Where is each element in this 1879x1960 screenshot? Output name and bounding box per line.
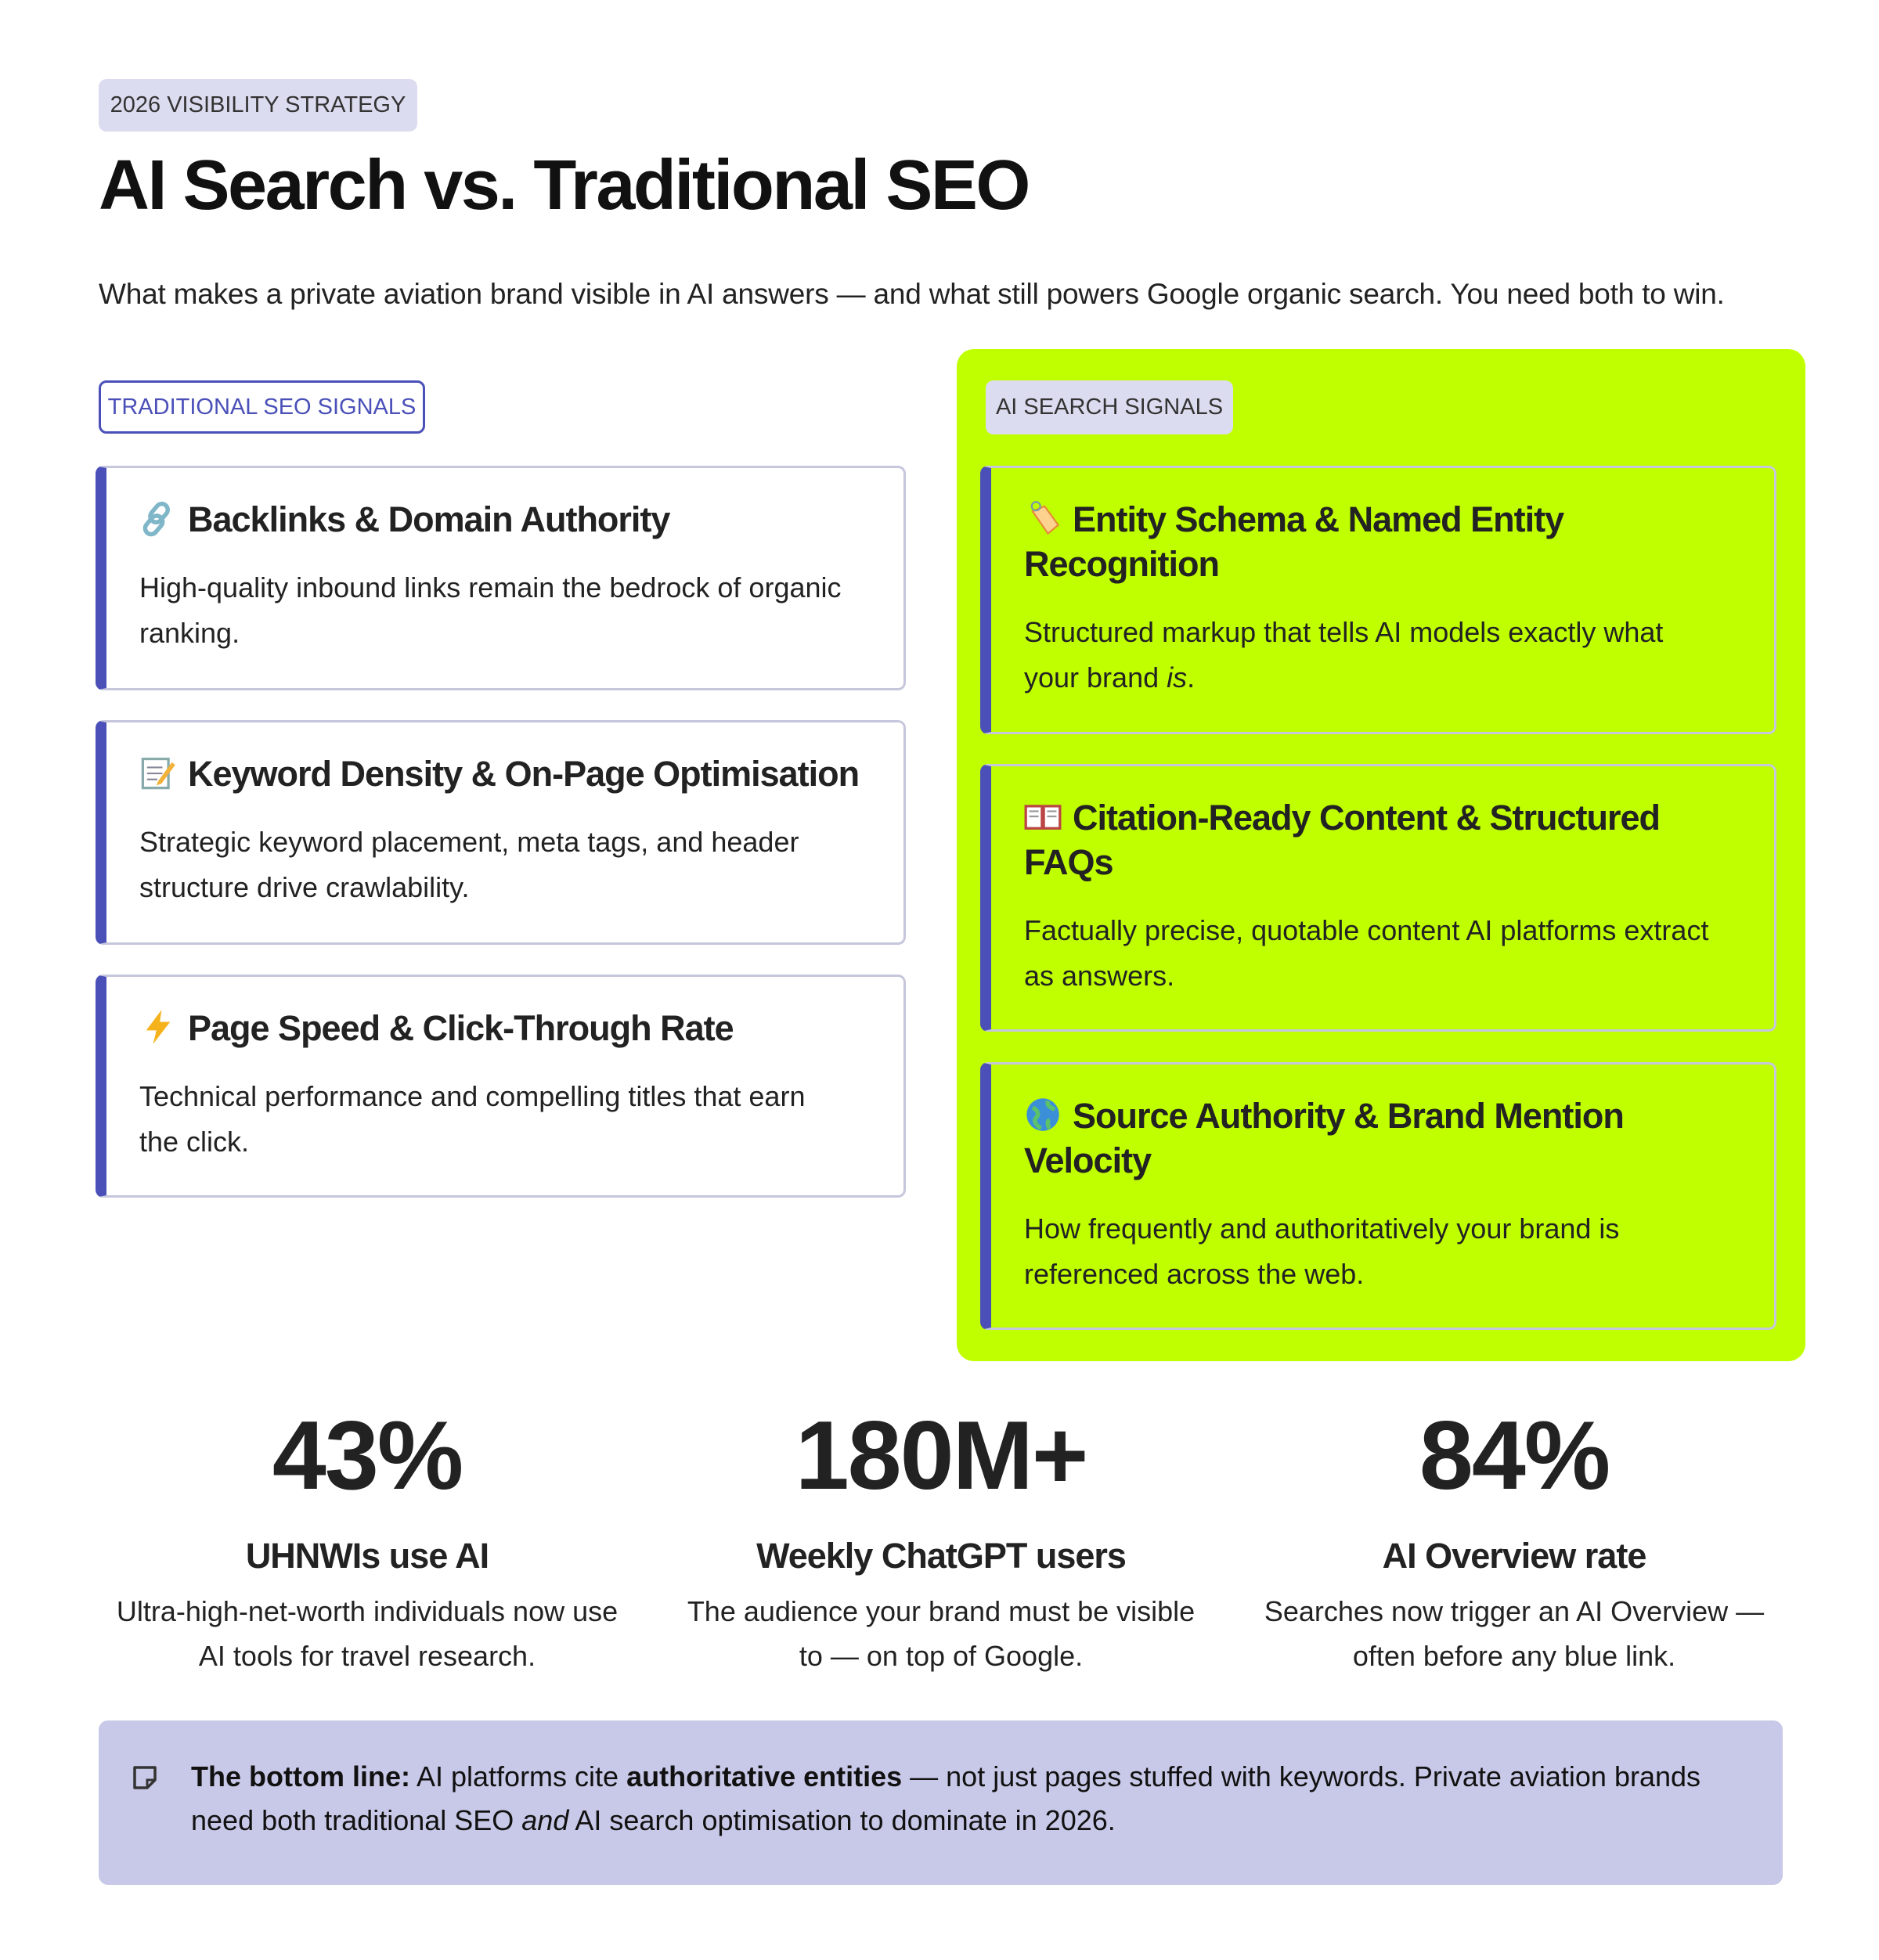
card title: entity: Entity Schema & Named Entity [1073, 499, 1563, 539]
card text [139, 826, 799, 903]
stat: 84%: AI Overview rate [1383, 1536, 1646, 1576]
card: page speed [96, 975, 906, 1198]
card title: speed: Page Speed & Click-Through Rate [188, 1008, 734, 1048]
card title: source [1024, 1096, 1624, 1180]
stat: 180M+ [687, 1402, 1195, 1672]
title: AI Search vs. Traditional SEO [99, 146, 1029, 225]
card text: the click. [139, 1126, 249, 1158]
card title: citation [1024, 798, 1660, 882]
card title: source: Velocity [1024, 1140, 1151, 1180]
card title: entity [1024, 499, 1564, 584]
tag: AI search signals [986, 380, 1233, 434]
tag: 2026 visibility strategy: 2026 VISIBILITY STRATEGY [110, 92, 406, 117]
card text: How frequently and authoritatively your brand is [1024, 1212, 1619, 1245]
stat: 180M+: 180M+ [795, 1402, 1087, 1510]
card text [139, 571, 842, 649]
card title: entity: Recognition [1024, 544, 1219, 584]
stat: 43%: UHNWIs use AI [246, 1536, 489, 1576]
card: backlinks [96, 466, 906, 690]
stat: 43% [117, 1402, 618, 1672]
tag: AI search signals: AI SEARCH SIGNALS [996, 395, 1223, 420]
stat: 43%: AI tools for travel research. [199, 1640, 536, 1672]
icon: note [133, 1766, 157, 1789]
card text: Factually precise, quotable content AI platforms extract [1024, 914, 1708, 946]
card: keyword density [96, 720, 906, 945]
stat: 43%: 43% [272, 1402, 462, 1510]
card: source authority [980, 1062, 1776, 1330]
stat: 180M+: Weekly ChatGPT users [756, 1536, 1126, 1576]
card text: Structured markup that tells AI models exactly what [1024, 616, 1663, 648]
subtitle: What makes a private aviation brand visible in AI answers — and what still powers Google organic search. You need both to win. [99, 278, 1725, 310]
tag: traditional SEO signals [99, 380, 425, 434]
stat: 43%: Ultra-high-net-worth individuals now use [117, 1595, 618, 1627]
card text: your brand is. [1024, 661, 1195, 694]
card title: backlinks: Backlinks & Domain Authority [188, 499, 669, 539]
tag: traditional SEO signals: TRADITIONAL SEO SIGNALS [108, 395, 416, 420]
card text [1024, 616, 1663, 694]
card text: ranking. [139, 617, 240, 649]
card title: citation: FAQs [1024, 842, 1113, 882]
card text: Strategic keyword placement, meta tags, and header [139, 826, 799, 858]
callout: bottom line: need both traditional SEO and AI search optimisation to dominate in 2026. [191, 1804, 1116, 1836]
stat: 180M+: to — on top of Google. [799, 1640, 1083, 1672]
callout: bottom line [99, 1720, 1783, 1885]
card title: keyword: Keyword Density & On-Page Optimisation [188, 754, 859, 794]
card title: source: Source Authority & Brand Mention [1073, 1096, 1624, 1136]
card text: referenced across the web. [1024, 1258, 1364, 1290]
card text [1024, 914, 1708, 992]
callout: bottom line: The bottom line: AI platforms cite authoritative entities — not just pages stuffed with keywords. Private aviation brands [191, 1760, 1700, 1792]
stat: 180M+: The audience your brand must be visible [687, 1595, 1195, 1627]
panel: AI search signals [957, 349, 1805, 1361]
stat: 84%: often before any blue link. [1353, 1640, 1675, 1672]
card text [139, 1080, 805, 1158]
card title: citation: Citation-Ready Content & Structured [1073, 798, 1660, 838]
card: entity schema [980, 466, 1776, 734]
card text: High-quality inbound links remain the bedrock of organic [139, 571, 842, 603]
card: citation-ready [980, 764, 1776, 1032]
card text: Technical performance and compelling titles that earn [139, 1080, 805, 1112]
card text: as answers. [1024, 960, 1174, 992]
card text: structure drive crawlability. [139, 871, 469, 903]
stat: 84%: 84% [1419, 1402, 1609, 1510]
stat: 84%: Searches now trigger an AI Overview — [1264, 1595, 1764, 1627]
card text [1024, 1212, 1619, 1290]
tag: 2026 visibility strategy [99, 79, 417, 132]
stat: 84% [1264, 1402, 1765, 1672]
